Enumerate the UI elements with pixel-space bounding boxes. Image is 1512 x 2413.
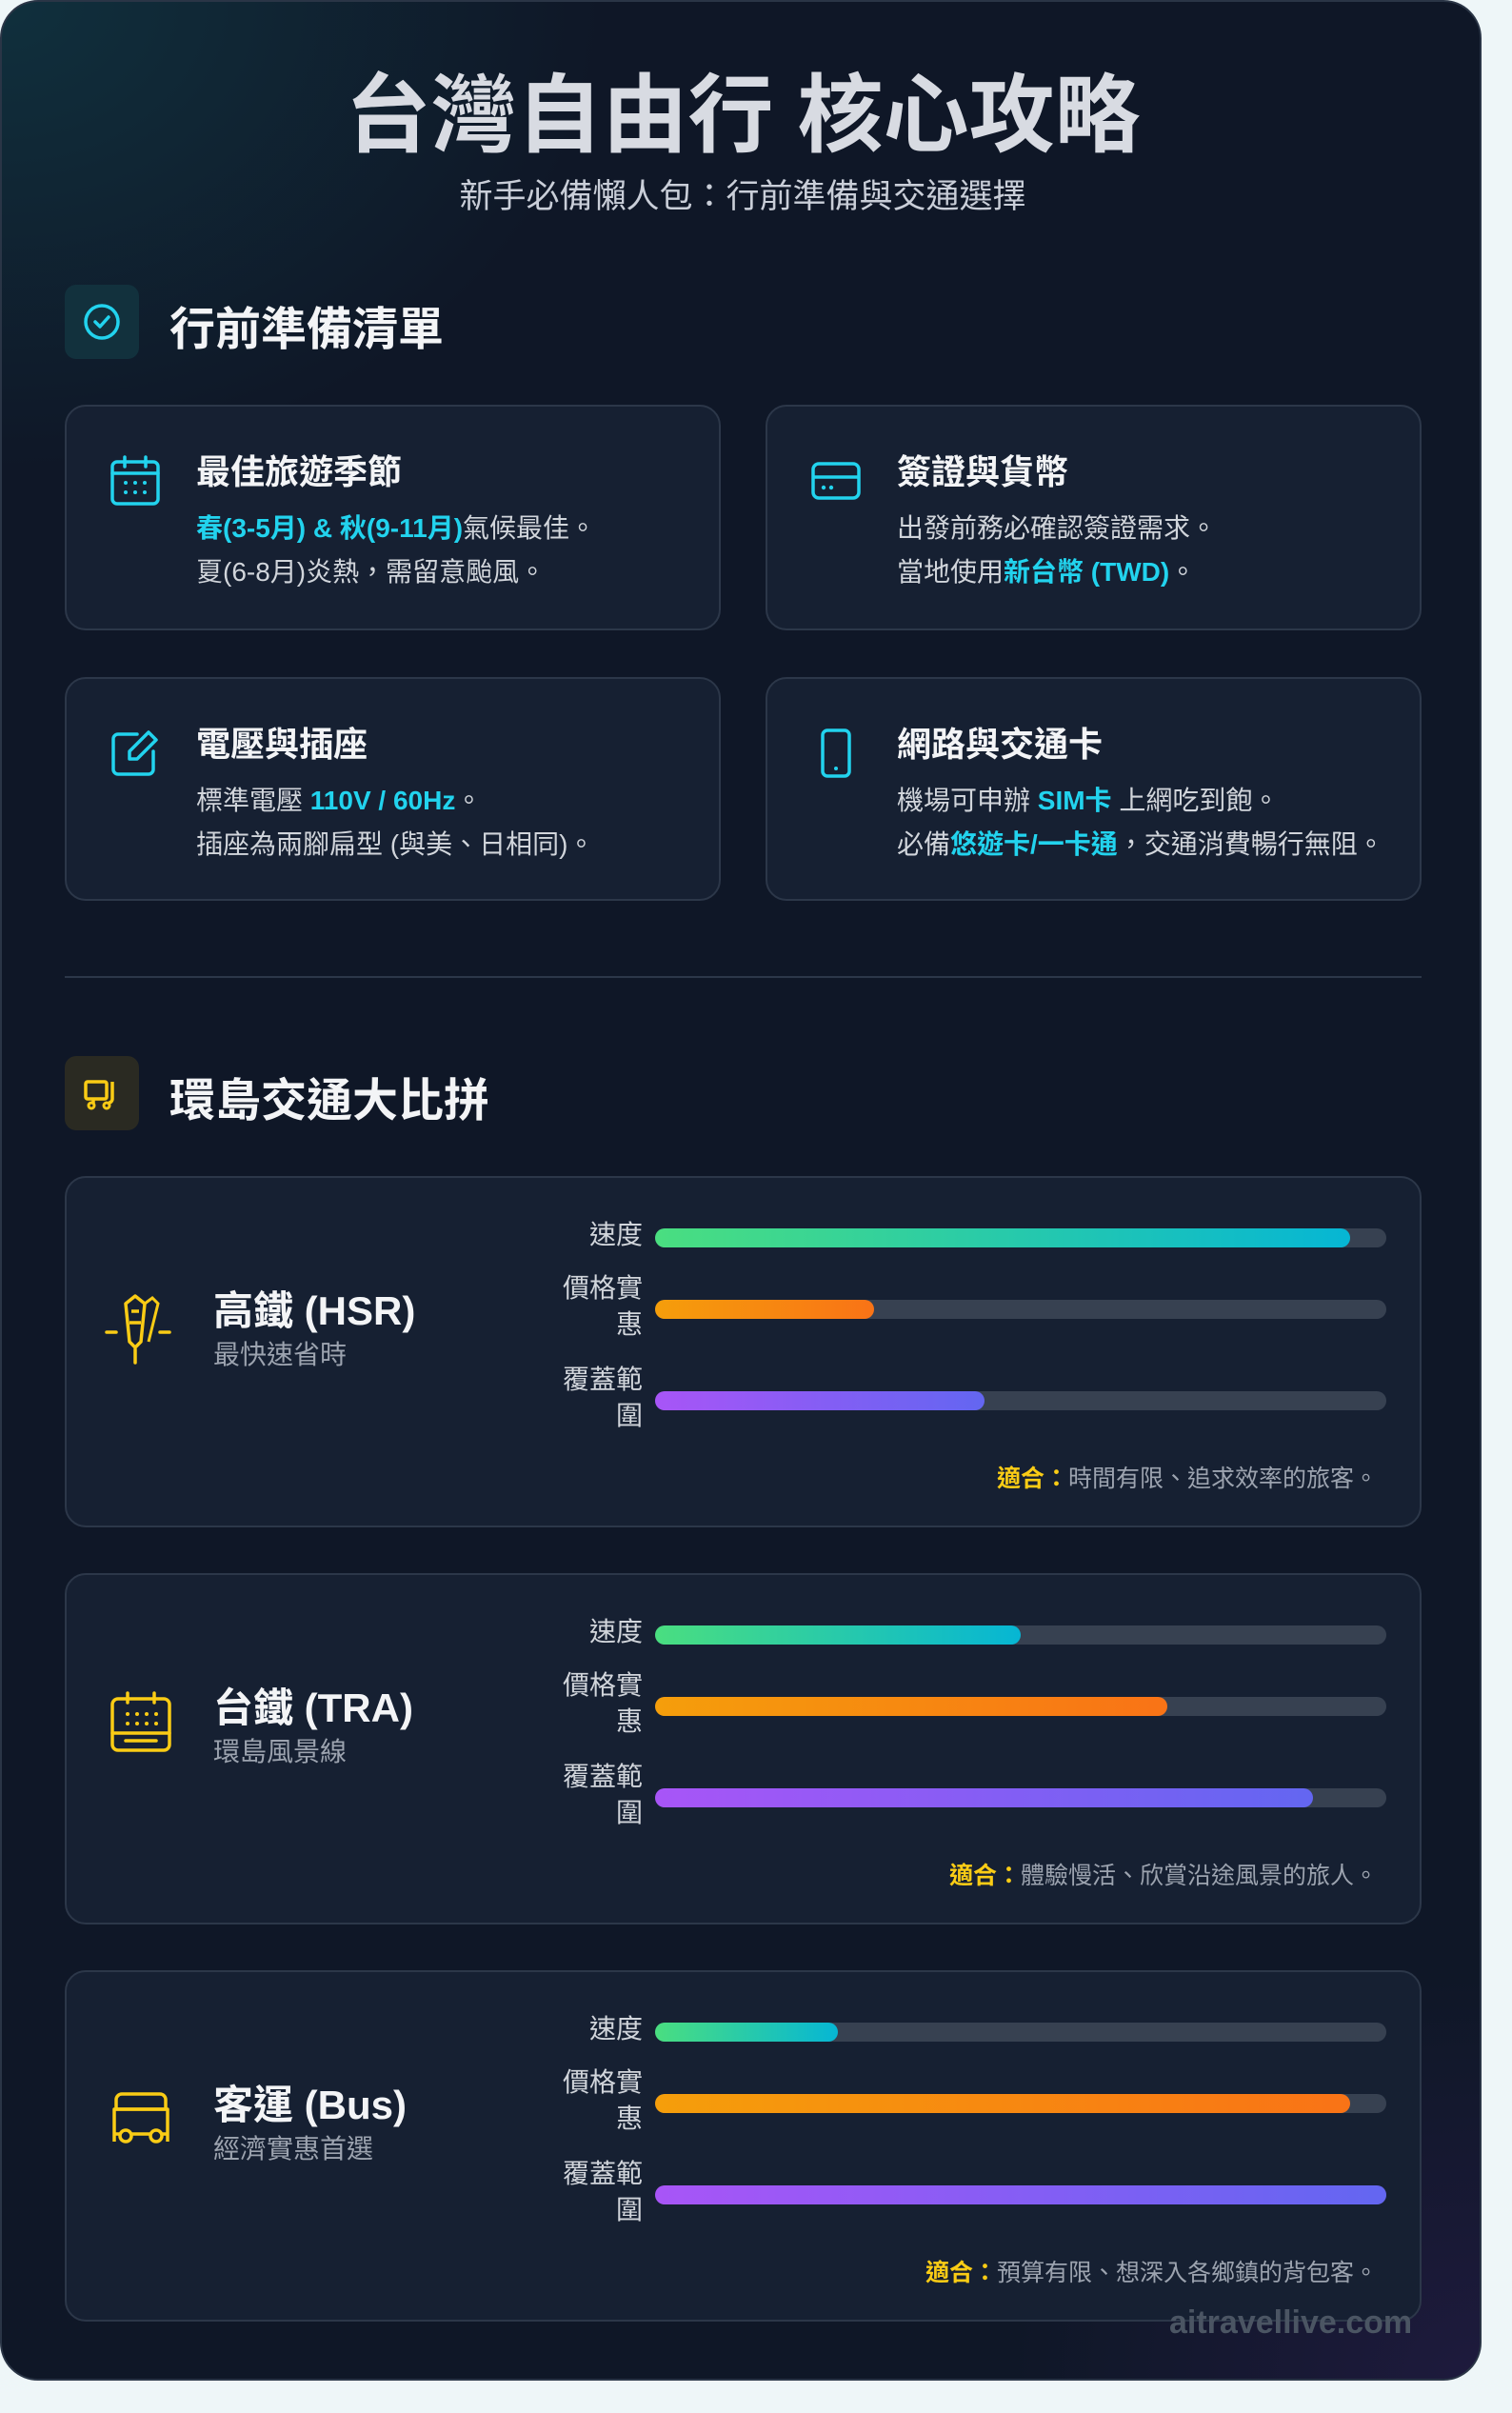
panel: best season: 夏(6-8月)炎熱，需留意颱風。 — [196, 557, 546, 587]
name: 客運 (Bus) — [213, 2083, 407, 2127]
icon: section checklist — [65, 285, 139, 359]
card title: 電壓與插座 — [196, 725, 368, 764]
panel: HSR — [65, 1176, 1422, 1527]
icon: TRA — [110, 1691, 171, 1752]
panel: HSR: 最快速省時 — [213, 1340, 347, 1369]
panel: visa and currency — [766, 405, 1422, 630]
subtitle: 新手必備懶人包：行前準備與交通選擇 — [459, 178, 1026, 215]
bar chart: 速度 — [589, 2014, 643, 2044]
panel: best season — [65, 405, 721, 630]
card text: 出發前務必確認簽證需求。 — [897, 513, 1217, 543]
panel: visa and currency: 當地使用新台幣 (TWD)。 — [897, 557, 1196, 587]
card text: 標準電壓 110V / 60Hz。 — [196, 786, 482, 815]
bar chart — [563, 2014, 1386, 2224]
bar chart: 惠 — [616, 2104, 643, 2133]
icon: pencil — [111, 730, 158, 776]
bar chart: 速度 — [589, 1220, 643, 1249]
icon: HSR — [105, 1294, 171, 1365]
bar chart — [563, 1617, 1386, 1827]
fit text: 適合：體驗慢活、欣賞沿途風景的旅人。 — [949, 1863, 1378, 1889]
icon: bus — [112, 2092, 169, 2144]
card text: 機場可申辦 SIM卡 上網吃到飽。 — [897, 786, 1279, 815]
panel: network and transit card: 必備悠遊卡/一卡通，交通消費暢行無阻。 — [897, 829, 1384, 859]
panel: TRA: 環島風景線 — [213, 1737, 347, 1766]
bar chart: 圍 — [616, 1798, 643, 1827]
panel: voltage: 插座為兩腳扁型 (與美、日相同)。 — [196, 829, 594, 859]
bar chart: 速度 — [589, 1617, 643, 1646]
panel: TRA — [65, 1573, 1422, 1924]
heading: 環島交通大比拼: 環島交通大比拼 — [169, 1076, 489, 1127]
card title: 網路與交通卡 — [897, 725, 1103, 764]
fit text: 適合：時間有限、追求效率的旅客。 — [997, 1466, 1378, 1492]
bar chart: 圍 — [616, 2195, 643, 2224]
card title: 最佳旅遊季節 — [196, 452, 402, 491]
bar chart: 圍 — [616, 1401, 643, 1430]
card title: 簽證與貨幣 — [897, 452, 1068, 491]
bar chart: 覆蓋範 — [563, 2159, 643, 2188]
icon: phone — [821, 728, 851, 778]
panel: Bus: 經濟實惠首選 — [213, 2134, 373, 2164]
bar chart: 惠 — [616, 1309, 643, 1339]
bar chart: 惠 — [616, 1706, 643, 1736]
panel: Bus — [65, 1970, 1422, 2322]
bar chart: 價格實 — [563, 2067, 643, 2097]
card text: 春(3-5月) & 秋(9-11月)氣候最佳。 — [196, 513, 596, 543]
bar chart — [563, 1220, 1386, 1430]
icon: calendar — [110, 455, 160, 506]
bar chart: 覆蓋範 — [563, 1762, 643, 1791]
bar chart: 覆蓋範 — [563, 1365, 643, 1394]
fit text: 適合：預算有限、想深入各鄉鎮的背包客。 — [925, 2260, 1378, 2286]
bar chart: 價格實 — [563, 1273, 643, 1303]
panel: network and transit card — [766, 677, 1422, 901]
icon: section transport — [65, 1056, 139, 1130]
title: 台灣自由行 核心攻略 — [345, 69, 1141, 164]
panel: voltage — [65, 677, 721, 901]
icon: card — [811, 462, 861, 500]
name: 高鐵 (HSR) — [213, 1288, 415, 1333]
name: 台鐵 (TRA) — [213, 1685, 413, 1730]
watermark: aitravellive.com — [1169, 2304, 1412, 2341]
bar chart: 價格實 — [563, 1670, 643, 1700]
heading: 行前準備清單: 行前準備清單 — [169, 305, 444, 355]
